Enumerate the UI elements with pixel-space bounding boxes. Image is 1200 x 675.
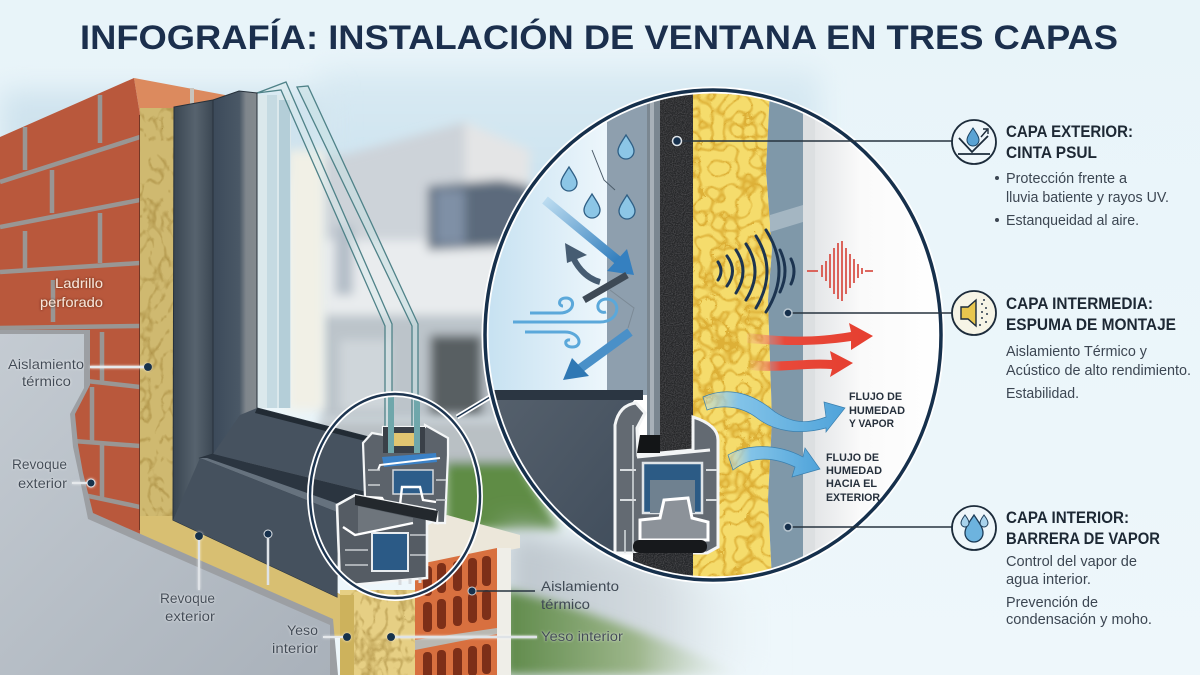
- red arrows: [747, 323, 873, 377]
- text: capa intermedia: CAPA INTERMEDIA:: [1006, 294, 1153, 313]
- lower profile: [337, 495, 437, 586]
- text: capa interior: condensación y moho.: [1006, 611, 1152, 628]
- text: capa exterior: CAPA EXTERIOR:: [1006, 122, 1133, 141]
- insulation layer: [140, 108, 416, 675]
- moisture flow arrows: [703, 392, 845, 477]
- rain arrow: [545, 200, 634, 275]
- flow label: humedad y vapor: Y VAPOR: [849, 418, 894, 430]
- frame slab: [496, 400, 634, 552]
- flow label: humedad hacia el exterior: FLUJO DE: [826, 452, 879, 464]
- grey panel: [607, 90, 647, 395]
- text: capa intermedia: [1006, 294, 1191, 402]
- text: capa intermedia: Aislamiento Térmico y: [1006, 343, 1147, 360]
- label: aislamiento térmico right: térmico: [541, 596, 590, 612]
- icon: capa interior: [952, 506, 996, 550]
- outside sky: [488, 122, 607, 390]
- label: ladrillo perforado: Ladrillo: [55, 275, 103, 291]
- label: aislamiento térmico left: Aislamiento: [8, 356, 84, 372]
- flow label: humedad hacia el exterior: HACIA EL: [826, 478, 877, 490]
- label: revoque exterior left: exterior: [18, 475, 67, 491]
- icon: capa intermedia: [952, 291, 996, 335]
- label: yeso interior left: interior: [272, 640, 318, 656]
- flow label: humedad hacia el exterior: HUMEDAD: [826, 465, 882, 477]
- label: revoque exterior bottom: Revoque: [160, 590, 215, 606]
- label: revoque exterior left: Revoque: [12, 456, 67, 472]
- red waveform: [807, 241, 873, 301]
- icon: capa exterior: [952, 120, 996, 164]
- callout lines: [672, 136, 952, 531]
- label: yeso interior right: [387, 628, 623, 644]
- downward arrow: [563, 332, 630, 380]
- text: capa interior: agua interior.: [1006, 571, 1091, 588]
- window frame: [173, 91, 400, 597]
- text: capa interior: [1006, 508, 1160, 628]
- title: INFOGRAFÍA: INSTALACIÓN DE VENTANA EN TRES CAPAS: [80, 19, 1118, 57]
- text: capa interior: BARRERA DE VAPOR: [1006, 529, 1160, 548]
- rain drops: [561, 135, 635, 219]
- label: yeso interior left: Yeso: [287, 622, 318, 638]
- text: capa intermedia: Estabilidad.: [1006, 385, 1079, 402]
- wind lines: [513, 298, 617, 347]
- brick block below sill: [400, 515, 520, 675]
- flow label: humedad y vapor: [849, 391, 905, 430]
- label: ladrillo perforado: perforado: [40, 294, 103, 310]
- text: capa interior: CAPA INTERIOR:: [1006, 508, 1129, 527]
- label: revoque exterior bottom: [160, 532, 215, 624]
- text: capa intermedia: Acústico de alto rendimiento.: [1006, 362, 1191, 379]
- label: yeso interior right: Yeso interior: [541, 628, 623, 644]
- label: revoque exterior bottom: exterior: [165, 608, 215, 624]
- vapour barrier: [803, 90, 815, 580]
- text: capa interior: Control del vapor de: [1006, 553, 1137, 570]
- text: capa exterior: Protección frente a: [1006, 170, 1128, 187]
- label: ladrillo perforado: [40, 275, 103, 310]
- interior white: [815, 120, 854, 550]
- flow label: humedad y vapor: HUMEDAD: [849, 405, 905, 417]
- blurred house: [322, 122, 532, 420]
- profile section: [615, 403, 718, 585]
- flow label: humedad hacia el exterior: [826, 452, 882, 504]
- metal strip: [647, 90, 660, 440]
- blue-grey layer: [766, 90, 803, 580]
- label: aislamiento térmico right: [468, 578, 619, 612]
- flow label: humedad y vapor: FLUJO DE: [849, 391, 902, 403]
- text: capa intermedia: ESPUMA DE MONTAJE: [1006, 315, 1176, 334]
- plaster wall: [0, 330, 338, 675]
- sound waves in foam: [718, 230, 794, 312]
- rebound arrow: [565, 243, 634, 328]
- black sealing tape: [660, 90, 693, 460]
- label: aislamiento térmico right: Aislamiento: [541, 578, 619, 594]
- text: capa exterior: CINTA PSUL: [1006, 143, 1097, 162]
- label: yeso interior left: [272, 622, 351, 656]
- large detail circle: [485, 90, 945, 590]
- glass panes: [257, 82, 418, 432]
- label: aislamiento térmico left: [8, 356, 152, 389]
- text: capa exterior: [995, 122, 1169, 229]
- zoom connector: [457, 397, 490, 417]
- flow label: humedad hacia el exterior: EXTERIOR: [826, 492, 880, 504]
- label: aislamiento térmico left: térmico: [22, 373, 71, 389]
- text: capa exterior: lluvia batiente y rayos UV.: [1006, 189, 1169, 206]
- yellow foam: [693, 90, 772, 580]
- text: capa interior: Prevención de: [1006, 594, 1098, 611]
- detail circle: window profile section: [310, 394, 480, 598]
- text: capa exterior: Estanqueidad al aire.: [1006, 212, 1139, 229]
- brick wall: [0, 78, 225, 545]
- upper profile: [363, 425, 448, 523]
- pointer: window frame: [264, 530, 272, 585]
- label: revoque exterior left: [12, 456, 95, 491]
